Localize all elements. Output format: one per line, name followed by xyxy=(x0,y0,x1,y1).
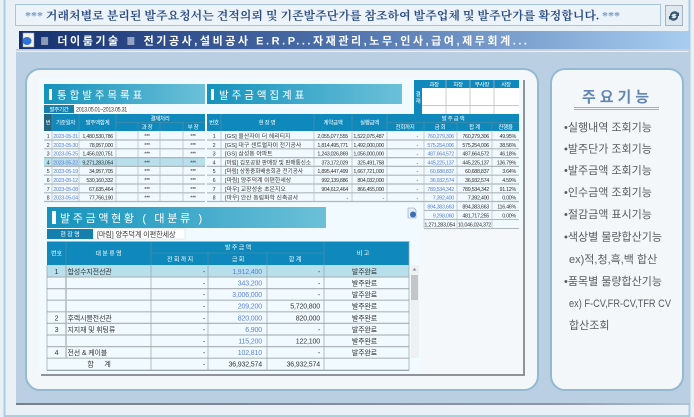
table rows: 지지재 및 휘팅류 xyxy=(68,325,116,334)
table rows: 6,900 xyxy=(245,327,262,334)
table rows: 8 xyxy=(47,196,50,202)
table rows: 575,254,006 xyxy=(462,143,489,149)
table rows: 발주완료 xyxy=(352,267,378,276)
table rows: 91.12% xyxy=(500,187,517,193)
table rows: 10,046,024,372 xyxy=(458,222,491,228)
table rows: 3 xyxy=(213,152,216,158)
column headers: 금 회 xyxy=(232,256,244,264)
table rows: 2 xyxy=(213,143,216,149)
table rows: - xyxy=(318,280,321,288)
table rows: - xyxy=(203,350,206,357)
site name field xyxy=(47,229,185,239)
panel: screenshot container xyxy=(26,69,538,390)
table rows: 804,032,000 xyxy=(357,178,384,184)
table rows: - xyxy=(416,152,418,158)
table rows: - xyxy=(318,327,321,334)
column headers: 번호 xyxy=(51,250,62,258)
order period filter: 발주기간 xyxy=(49,105,69,113)
column headers: 번 xyxy=(46,118,51,126)
table rows: 3 xyxy=(47,152,50,158)
table rows: 4 xyxy=(47,160,50,166)
table rows: *** xyxy=(144,169,151,175)
table: integrated order list xyxy=(44,84,205,202)
table rows: 9,271,283,054 xyxy=(82,160,113,166)
table rows: 발주완료 xyxy=(352,325,378,334)
table rows: 7,392,400 xyxy=(433,196,454,202)
feature list: •실행내역 조회기능 xyxy=(564,121,652,134)
table rows: *** xyxy=(144,178,151,184)
column headers: 발 주 금 액 xyxy=(442,114,465,122)
table rows: - xyxy=(416,134,418,140)
table rows: - xyxy=(318,350,321,357)
approval box: 부사장 xyxy=(475,80,489,88)
table rows: 2023-05-12 xyxy=(53,178,78,184)
approval box: 재 xyxy=(416,97,421,105)
table rows: 36,932,574 xyxy=(286,362,320,369)
feature list: •발주금액 조회기능 xyxy=(564,164,652,177)
table rows: 1,492,000,000 xyxy=(353,143,384,149)
table rows: 34,957,705 xyxy=(89,169,113,175)
table rows: 820,000 xyxy=(238,315,262,322)
screenshot shadow xyxy=(41,80,525,376)
highlighted row xyxy=(44,157,205,166)
table rows: 115,200 xyxy=(238,338,262,346)
table rows: 530,160,332 xyxy=(86,178,113,184)
table rows: 46.18% xyxy=(500,152,517,158)
table rows: [마림] 김포공항 판매장 및 판매통신소 xyxy=(225,158,312,166)
table rows: 7 xyxy=(47,187,50,193)
table rows: 136.79% xyxy=(497,160,517,166)
table rows: 4 xyxy=(55,350,59,357)
table rows: 1,056,000,000 xyxy=(353,152,384,158)
table rows: 2,055,077,555 xyxy=(317,134,348,140)
table rows: 373,172,029 xyxy=(321,160,348,166)
table rows: - xyxy=(416,143,418,149)
column headers: 실행금액 xyxy=(360,118,379,126)
table rows: 992,139,886 xyxy=(321,178,348,184)
table rows xyxy=(44,131,205,202)
feature list: •절감금액 표시기능 xyxy=(564,208,652,221)
table rows: 1,814,495,771 xyxy=(317,143,348,149)
table rows: *** xyxy=(190,143,197,149)
table rows: 60,688,837 xyxy=(430,169,454,175)
heading: order amount summary: 발주금액집계표 xyxy=(219,90,305,102)
table rows: 전선 & 케이블 xyxy=(68,348,108,357)
table rows: *** xyxy=(144,187,151,193)
table rows: *** xyxy=(190,187,197,193)
table rows: 77,766,190 xyxy=(89,196,113,202)
table rows: 102,810 xyxy=(238,350,262,357)
table rows: 760,279,306 xyxy=(462,134,489,140)
approval box: 과장 xyxy=(429,80,439,88)
table rows: 209,200 xyxy=(238,304,262,311)
table rows: 1,895,447,499 xyxy=(317,169,348,175)
table rows: 78,957,000 xyxy=(89,143,113,149)
table rows: 487,664,572 xyxy=(427,152,454,158)
table rows: 7,392,400 xyxy=(468,196,489,202)
table rows: [마림] 양주덕계 이편한세상 xyxy=(225,176,292,184)
table rows: 0.00% xyxy=(502,213,516,219)
table rows: - xyxy=(203,304,206,311)
table rows: 1,480,530,786 xyxy=(82,134,113,140)
table rows: 2023-05-25 xyxy=(53,152,78,158)
table rows: 발주완료 xyxy=(352,302,378,311)
table rows: 789,534,342 xyxy=(427,187,454,193)
heading: order amount summary xyxy=(207,84,402,104)
column headers: 금 회 xyxy=(435,123,446,131)
column headers: 대 분 류 명 xyxy=(95,250,122,258)
table rows: - xyxy=(203,315,206,322)
table rows: 481,717,255 xyxy=(462,213,489,219)
heading: key features: 주요기능 xyxy=(582,89,649,106)
banner: company title xyxy=(19,31,690,49)
feature list: ex)적,청,흑,백 합산 xyxy=(569,252,657,266)
column headers: 합 계 xyxy=(469,123,480,131)
table rows: 4 xyxy=(213,160,216,166)
table rows: 2 xyxy=(55,315,59,322)
table rows: 1,271,283,054 xyxy=(424,222,455,228)
table rows: 2023-05-04 xyxy=(53,196,78,202)
table rows: 발주완료 xyxy=(352,348,378,357)
table rows: *** xyxy=(144,134,151,140)
table rows: 343,200 xyxy=(238,280,262,288)
table rows: *** xyxy=(190,134,197,140)
table rows: 1,456,020,751 xyxy=(82,152,113,158)
table rows: - xyxy=(416,160,418,166)
table rows: 38.56% xyxy=(500,143,517,149)
heading: key features xyxy=(574,89,659,110)
column headers xyxy=(207,114,519,131)
column headers: 비 고 xyxy=(357,250,370,258)
site name field: [마림] 양주덕계 이편한세상 xyxy=(97,230,176,239)
table rows: 2023-05-08 xyxy=(53,187,78,193)
table rows: 49.95% xyxy=(500,134,517,140)
table rows: 발주완료 xyxy=(352,278,378,288)
table rows: 3 xyxy=(55,327,59,334)
table rows: 116.46% xyxy=(497,204,517,210)
table rows: [GS] 대구 센트럴자이 전기공사 xyxy=(225,141,302,149)
table rows: 445,225,137 xyxy=(462,160,489,166)
table rows: - xyxy=(203,280,206,288)
table: order amount summary xyxy=(207,80,519,228)
table rows: *** xyxy=(190,160,197,166)
column headers: 진행율 xyxy=(498,123,513,131)
table rows: 2023-05-19 xyxy=(53,169,78,175)
table rows: [마우] 교장성송 초은지오 xyxy=(225,185,286,193)
table rows: - xyxy=(203,338,206,346)
table rows: 2023-05-22 xyxy=(53,160,78,166)
approval box xyxy=(414,80,519,114)
table rows: - xyxy=(318,269,321,276)
table rows: - xyxy=(203,269,206,276)
table rows: 3.64% xyxy=(502,169,516,175)
table rows: *** xyxy=(144,196,151,202)
banner: company title: ≣ 더이룸기술 ≣ 전기공사,설비공사 E.R.P...자재관리,노무,인사,급여,제무회계... xyxy=(40,34,527,48)
table rows: 820,000 xyxy=(296,315,320,322)
table rows: - xyxy=(318,292,321,299)
table rows: 122,100 xyxy=(296,338,320,346)
column headers: 과 장 xyxy=(142,123,153,131)
table rows: 7 xyxy=(213,187,216,193)
table rows: 5 xyxy=(213,169,216,175)
feature list xyxy=(564,121,672,332)
column headers: 결재처리 xyxy=(150,114,170,122)
table rows: 2023-05-31 xyxy=(53,134,78,140)
panel: key features xyxy=(551,69,683,390)
order period filter xyxy=(44,105,129,113)
approval box: 차장 xyxy=(453,80,463,88)
table rows: - xyxy=(416,196,418,202)
feature list: •발주단가 조회기능 xyxy=(564,142,652,156)
table rows: 894,383,663 xyxy=(462,204,489,210)
table rows: 0.00% xyxy=(502,196,516,202)
table rows: 3,006,000 xyxy=(232,292,262,299)
site name field: 현 장 명 xyxy=(60,230,80,238)
table rows: 1 xyxy=(213,134,216,140)
table rows: [GS] 삼성동 아파트 xyxy=(225,150,273,158)
table rows: [마우] 안산 동림화학 신축공사 xyxy=(225,194,299,202)
heading: integrated order list xyxy=(44,84,205,104)
table rows: 2023-05-30 xyxy=(53,143,78,149)
icon: refresh button xyxy=(666,6,682,26)
table rows: 2 xyxy=(47,143,50,149)
table rows: 6 xyxy=(213,178,216,184)
table rows: - xyxy=(416,187,418,193)
table rows: [마림] 상동중화배송회관 전기공사 xyxy=(225,167,304,175)
table rows: 9,298,060 xyxy=(433,213,454,219)
table rows: *** xyxy=(190,152,197,158)
scrollbar xyxy=(411,265,419,358)
table rows: - xyxy=(203,362,206,369)
table rows: - xyxy=(203,292,206,299)
table rows: 1,243,026,869 xyxy=(317,152,348,158)
table rows: 4.59% xyxy=(502,178,516,184)
table rows: 1,522,075,487 xyxy=(353,134,384,140)
table rows: 487,664,572 xyxy=(462,152,489,158)
table rows: *** xyxy=(190,196,197,202)
table rows: *** xyxy=(144,160,151,166)
table rows: *** xyxy=(144,143,151,149)
table rows: 1,667,721,000 xyxy=(353,169,384,175)
table rows: 67,635,464 xyxy=(89,187,113,193)
feature list: •인수금액 조회기능 xyxy=(564,186,652,199)
header notice xyxy=(16,4,660,26)
table rows xyxy=(207,131,519,228)
table rows: - xyxy=(346,196,348,202)
table rows: 325,491,758 xyxy=(357,160,384,166)
feature list: 합산조회 xyxy=(569,319,609,332)
approval box: 결 xyxy=(416,90,421,98)
table rows: 36,932,574 xyxy=(465,178,489,184)
table rows: 1 xyxy=(47,134,50,140)
table rows: 5 xyxy=(47,169,50,175)
heading: order amount status xyxy=(47,207,326,228)
table rows: 합성수지전선관 xyxy=(68,267,112,276)
column headers xyxy=(44,114,205,131)
table rows: 36,932,574 xyxy=(228,362,262,369)
table rows: 1,912,400 xyxy=(232,269,262,276)
order period filter: 2013.05.01~2013.05.31 xyxy=(76,107,128,113)
table rows: 발주완료 xyxy=(352,313,378,322)
heading: integrated order list: 통합발주목록표 xyxy=(57,90,143,102)
feature list: ex) F-CV,FR-CV,TFR CV xyxy=(569,298,672,310)
column headers: 현 장 명 xyxy=(259,118,276,126)
heading: order amount status: 발주금액현황 ( 대분류 ) xyxy=(60,212,202,225)
table rows: 1 xyxy=(55,269,59,276)
table rows: 36,932,574 xyxy=(430,178,454,184)
highlighted row xyxy=(47,265,409,277)
table rows: *** xyxy=(144,152,151,158)
table rows: 760,279,306 xyxy=(427,134,454,140)
table rows: 60,688,837 xyxy=(465,169,489,175)
table rows: *** xyxy=(190,169,197,175)
table rows: 789,534,342 xyxy=(462,187,489,193)
table rows: 445,225,137 xyxy=(427,160,454,166)
table rows: 894,383,663 xyxy=(427,204,454,210)
table rows: 866,455,000 xyxy=(357,187,384,193)
column headers xyxy=(47,242,409,265)
column headers: 번호 xyxy=(209,118,219,126)
table rows: - xyxy=(416,169,418,175)
column headers: 기준일자 xyxy=(56,118,75,126)
approval box: 사장 xyxy=(501,80,511,88)
table rows: 904,612,464 xyxy=(321,187,348,193)
table: order amount status by category xyxy=(44,205,421,374)
header notice: *** 거래처별로 분리된 발주요청서는 견적의뢰 및 기존발주단가를 참조하여 발주업체 및 발주단가를 확정합니다. *** xyxy=(25,8,620,22)
table rows: [GS] 울산자이 더 헤리티지 xyxy=(225,132,290,140)
column headers: 계약금액 xyxy=(323,118,343,126)
table rows: 8 xyxy=(213,196,216,202)
icon: page with globe xyxy=(22,33,34,47)
table rows: *** xyxy=(190,178,197,184)
column headers: 발 주 금 액 xyxy=(225,244,251,252)
feature list: •품목별 물량합산기능 xyxy=(564,275,662,288)
table rows: 발주완료 xyxy=(352,290,378,299)
feature list: •색상별 물량합산기능 xyxy=(564,230,662,244)
table rows: 발주완료 xyxy=(352,336,378,346)
table rows: - xyxy=(203,327,206,334)
table rows: 575,254,006 xyxy=(427,143,454,149)
table rows xyxy=(47,241,409,370)
column headers: 부 장 xyxy=(188,124,199,131)
table rows: 합 계 xyxy=(87,360,111,369)
column headers: 합 계 xyxy=(289,256,301,264)
table rows: - xyxy=(416,178,418,184)
table rows: - xyxy=(382,196,384,202)
table rows: 5,720,800 xyxy=(290,304,320,311)
column headers: 전회까지 xyxy=(395,123,415,131)
column headers: 전 회 까 지 xyxy=(167,256,193,264)
table rows: 6 xyxy=(47,178,50,184)
icon: magnifier document xyxy=(408,208,416,218)
table rows: 후렉시블전선관 xyxy=(68,313,112,322)
column headers: 발주액합계 xyxy=(86,118,110,126)
